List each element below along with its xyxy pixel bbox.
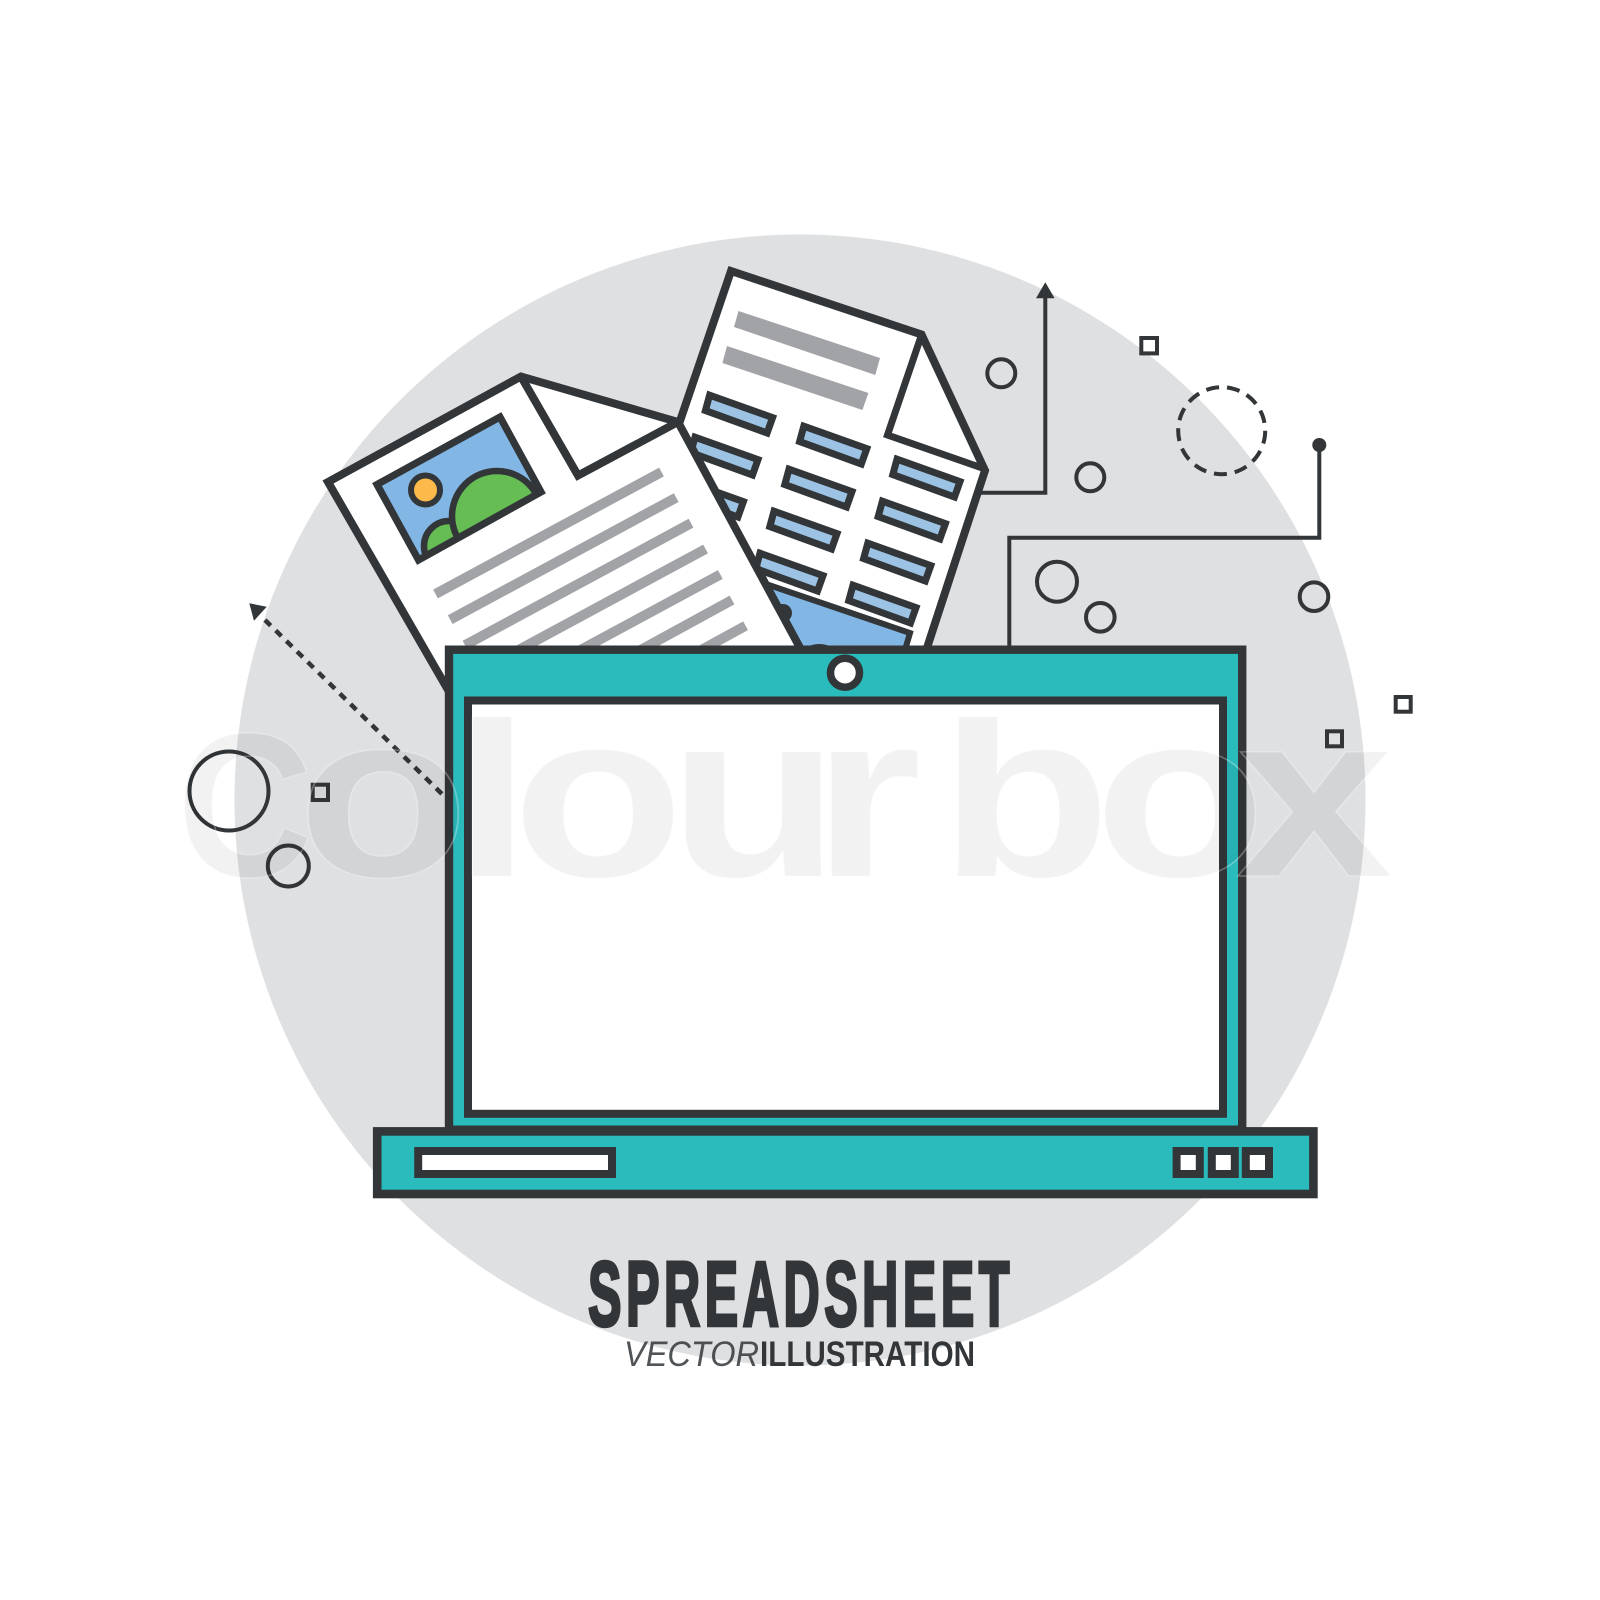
- panel: text document with picture: [322, 372, 804, 692]
- subtitle: VECTOR: [624, 1335, 759, 1374]
- webcam: [830, 658, 860, 687]
- panel: spreadsheet document: [676, 271, 985, 660]
- embedded picture: [745, 581, 910, 660]
- slot: [418, 1151, 612, 1174]
- subtitle: [624, 1335, 975, 1374]
- laptop screen: [468, 700, 1223, 1114]
- background circle: [234, 234, 1366, 1366]
- decoration: dashed circle: [1178, 387, 1265, 474]
- decoration: small circles: [190, 359, 1328, 886]
- laptop screen frame: [449, 650, 1242, 1130]
- subtitle: ILLUSTRATION: [760, 1335, 975, 1374]
- laptop base: [377, 1131, 1313, 1194]
- decoration: arrow from document going up: [980, 282, 1055, 493]
- picture thumbnail: [377, 417, 542, 571]
- table cells: [676, 395, 960, 623]
- hills: [420, 468, 536, 554]
- fold of spreadsheet document: [888, 335, 985, 469]
- watermark: olourbox: [297, 664, 1395, 927]
- header bars: [722, 311, 880, 410]
- watermark: C: [177, 691, 313, 920]
- decoration: dashed arrow: [249, 603, 443, 795]
- text lines: [436, 472, 746, 748]
- buttons: [1177, 1151, 1269, 1174]
- title: SPREADSHEET: [588, 1243, 1014, 1345]
- decoration: small squares: [313, 338, 1411, 800]
- decoration: pin connector line: [1009, 438, 1326, 650]
- panel: laptop: [377, 650, 1313, 1194]
- watermark: [185, 717, 1390, 879]
- fold of text document: [521, 376, 678, 476]
- sun: [411, 476, 440, 504]
